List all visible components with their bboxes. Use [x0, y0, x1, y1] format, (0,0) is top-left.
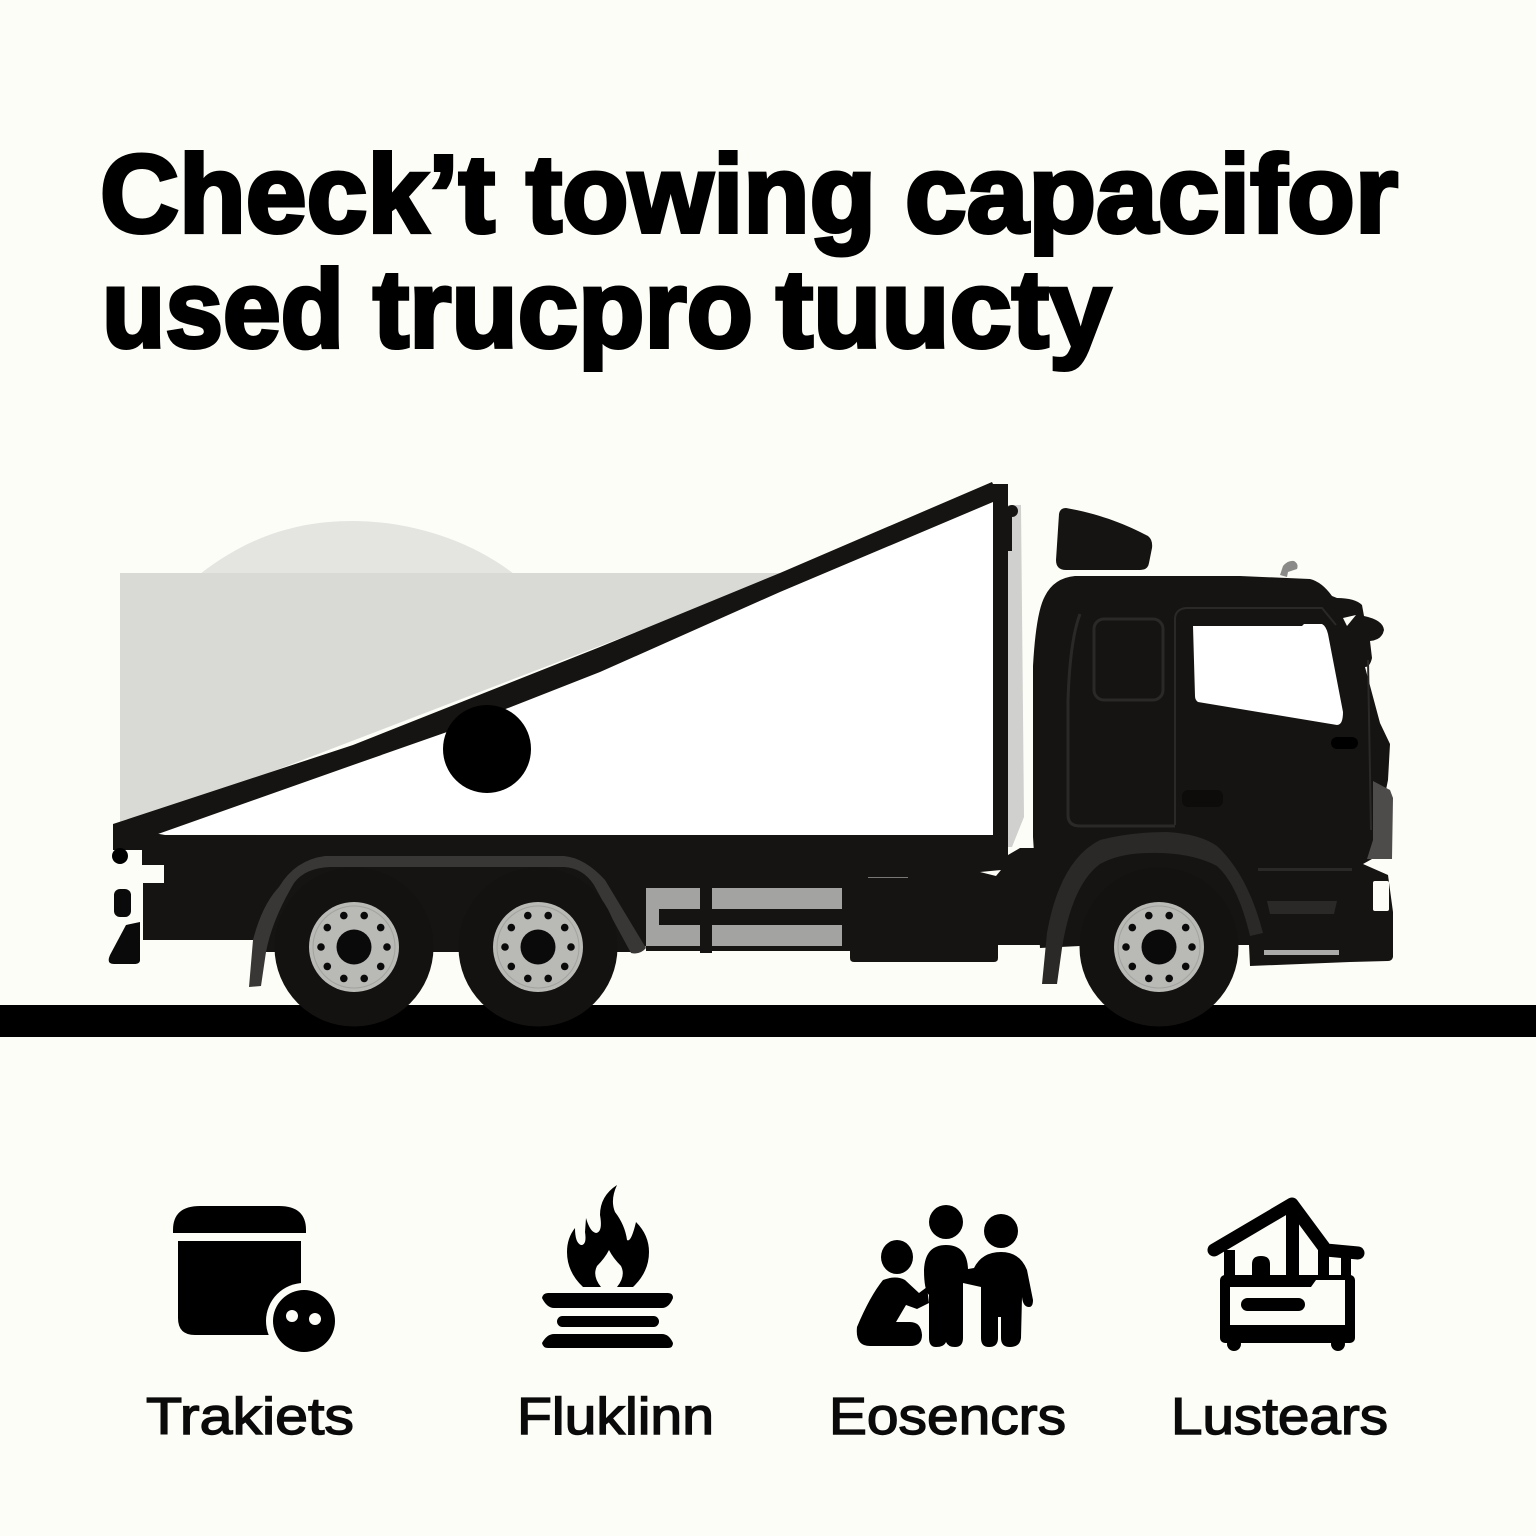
rear wheel one [274, 868, 434, 1026]
rear fender [249, 856, 646, 987]
icon: flame on layers [542, 1185, 673, 1348]
feature: Trakiets [146, 1206, 354, 1446]
cab [1033, 576, 1393, 966]
white tilted platform [158, 502, 993, 835]
grey side panel [646, 888, 842, 953]
title: towing [526, 133, 876, 256]
icon: container with circle [173, 1206, 342, 1359]
title [100, 133, 1398, 371]
tilted ramp beam [113, 482, 1018, 856]
door and panel lines [1068, 608, 1371, 830]
front lamp [1373, 881, 1389, 911]
door handles [1182, 790, 1223, 807]
feature: Eosencrs [829, 1205, 1066, 1446]
label: Eosencrs [829, 1388, 1066, 1446]
roof antenna [1280, 561, 1298, 577]
front wheel [1080, 868, 1238, 1026]
headlight housing [1367, 781, 1393, 859]
title: capacifor [905, 133, 1398, 256]
icon: group of people [857, 1205, 1033, 1347]
feature: Lustears [1171, 1204, 1388, 1446]
feature: Fluklinn [517, 1185, 714, 1446]
grille details [1258, 868, 1352, 955]
chassis [109, 826, 1045, 964]
label: Trakiets [146, 1388, 354, 1446]
icon: house stall [1214, 1204, 1358, 1351]
mirror gap [1343, 615, 1356, 626]
cab side window [1193, 624, 1343, 725]
rear wheel two [458, 868, 618, 1026]
roof spoiler [1056, 508, 1152, 570]
front fender [1042, 832, 1263, 984]
title: trucpro [373, 248, 753, 371]
grey background load [120, 505, 1024, 847]
label: Lustears [1171, 1388, 1388, 1446]
road line [0, 1005, 1536, 1037]
title: tuucty [776, 248, 1111, 371]
black ball [443, 705, 531, 793]
title: Check’t [100, 133, 495, 256]
truck illustration [109, 482, 1393, 1026]
label: Fluklinn [517, 1388, 714, 1446]
title: used [102, 248, 344, 371]
